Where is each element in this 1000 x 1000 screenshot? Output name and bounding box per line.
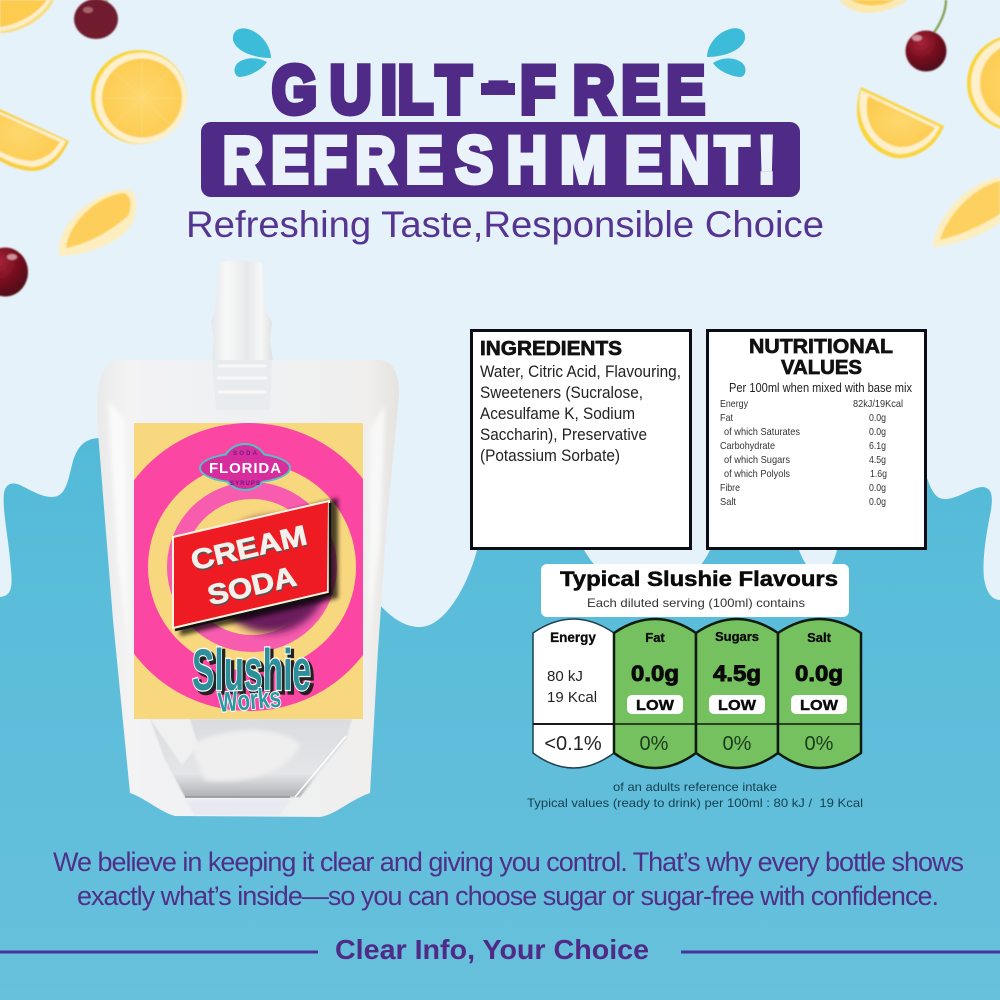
salt column xyxy=(778,619,861,768)
salt column: 0% xyxy=(805,733,834,755)
splash drops right xyxy=(707,28,746,77)
nutrition rows: Energy xyxy=(720,398,749,410)
nutritional heading: NUTRITIONAL xyxy=(749,336,893,358)
sugars column: 4.5g xyxy=(713,661,761,686)
headline: guilt-free: GUILT xyxy=(272,53,471,128)
subtitle: Refreshing Taste,Responsible Choice xyxy=(186,203,824,245)
headline: guilt-free: FREE xyxy=(520,53,705,128)
nutritional heading xyxy=(749,336,893,379)
nutrition rows: Carbohydrate xyxy=(720,440,775,452)
sugars column xyxy=(696,619,778,768)
nutrition rows: 0.0g xyxy=(869,426,886,438)
energy column: 19 Kcal xyxy=(547,689,597,706)
reference intake note: of an adults reference intake xyxy=(613,780,777,794)
nutrition rows: 4.5g xyxy=(869,454,886,466)
lemon slice top right xyxy=(839,0,908,13)
headline: guilt-free: - xyxy=(489,45,508,120)
nutrition rows: Fibre xyxy=(720,482,740,494)
pouch spout xyxy=(211,260,273,410)
title block xyxy=(186,28,824,245)
panel: typical slushie flavours heading: Each diluted serving (100ml) contains xyxy=(587,596,805,610)
product pouch xyxy=(97,260,399,817)
fat column xyxy=(614,619,696,768)
nutritional heading: VALUES xyxy=(781,357,862,379)
splash drops left xyxy=(233,28,271,77)
traffic light label xyxy=(533,619,861,768)
pouch body xyxy=(97,360,399,817)
cream soda sign: CREAM xyxy=(189,521,311,578)
footer tagline: Clear Info, Your Choice xyxy=(335,934,649,965)
energy column: 80 kJ xyxy=(547,668,583,685)
lemon slice top left xyxy=(0,0,54,33)
whole lemon left xyxy=(91,50,187,144)
nutrition rows: 0.0g xyxy=(869,412,886,424)
body statement: We believe in keeping it clear and giving you control. That’s why every bottle shows xyxy=(53,847,964,877)
nutrition rows: 1.6g xyxy=(870,468,887,480)
panel: nutritional values xyxy=(708,330,926,548)
nutrition rows: 0.0g xyxy=(869,496,886,508)
cream soda sign xyxy=(173,498,338,636)
fruit: lemon slices and cherries, right xyxy=(839,0,1000,247)
nutrition rows: 0.0g xyxy=(869,482,886,494)
lemon wedge left xyxy=(0,100,69,171)
florida badge: FLORIDA xyxy=(209,460,281,477)
ingredients list: Acesulfame K, Sodium xyxy=(480,404,635,423)
ingredients list: Saccharin), Preservative xyxy=(480,425,647,444)
clear window at bottom xyxy=(150,719,352,815)
slushie works logo: Slushie xyxy=(195,641,314,706)
sugars column: 0% xyxy=(723,733,752,755)
fat column: Fat xyxy=(645,630,665,645)
cherry top left xyxy=(74,0,118,39)
fruit: lemon slices and cherries, left xyxy=(0,0,187,296)
energy column xyxy=(533,619,614,768)
nutrition rows: Fat xyxy=(720,412,733,424)
salt column: Salt xyxy=(807,630,832,645)
whole lemon right xyxy=(967,35,1000,131)
florida badge: SYRUPS xyxy=(230,481,260,487)
energy column: Energy xyxy=(550,630,596,645)
lemon wedge right xyxy=(857,87,944,158)
fat column: 0.0g xyxy=(631,661,679,686)
reference intake note xyxy=(527,780,863,810)
fat column: 0% xyxy=(640,733,669,755)
fat column: LOW xyxy=(636,697,675,714)
nutrition rows xyxy=(720,398,903,508)
slushie works logo: Works xyxy=(217,682,282,718)
nutrition rows: of which Sugars xyxy=(724,454,790,466)
nutrition rows: 82kJ/19Kcal xyxy=(853,398,903,410)
cream soda sign: CREAM xyxy=(188,519,310,576)
sugars column: LOW xyxy=(718,697,757,714)
label concentric rings xyxy=(134,423,363,711)
nutrition rows: of which Polyols xyxy=(724,468,790,480)
cream soda sign: SODA xyxy=(205,561,299,611)
reference intake note: Typical values (ready to drink) per 100ml : 80 kJ / 19 Kcal xyxy=(527,796,863,810)
body statement xyxy=(53,847,964,911)
salt column: 0.0g xyxy=(795,661,843,686)
cream soda sign: SODA xyxy=(206,563,300,613)
lemon teardrop wedge right xyxy=(933,177,1000,247)
slushie works logo: Slushie xyxy=(192,638,311,703)
nutrition rows: 6.1g xyxy=(869,440,886,452)
ingredients list: (Potassium Sorbate) xyxy=(480,446,620,465)
sugars column: Sugars xyxy=(715,629,759,644)
ingredients heading: INGREDIENTS xyxy=(480,338,622,360)
cherry right xyxy=(906,0,946,72)
panel: typical slushie flavours heading: Typical Slushie Flavours xyxy=(560,568,838,591)
headline: refreshment: REFRESHMENT! xyxy=(223,123,776,197)
ingredients list: Water, Citric Acid, Flavouring, xyxy=(480,362,681,381)
nutrition rows: Salt xyxy=(720,496,736,508)
florida badge: SODA xyxy=(233,451,258,457)
florida badge xyxy=(199,443,291,491)
pouch highlights xyxy=(108,360,385,640)
ingredients list: Sweeteners (Sucralose, xyxy=(480,383,643,402)
banner xyxy=(201,122,800,197)
hyphen bar xyxy=(481,83,515,95)
nutrition rows: of which Saturates xyxy=(724,426,800,438)
blue milk wave background xyxy=(0,438,1000,1000)
panel: ingredients xyxy=(472,330,690,548)
lemon teardrop wedge left xyxy=(59,189,136,256)
salt column: LOW xyxy=(800,697,839,714)
cherry left xyxy=(0,248,28,296)
energy column: <0.1% xyxy=(544,733,602,755)
per 100ml note: Per 100ml when mixed with base mix xyxy=(729,381,913,395)
ingredients list xyxy=(480,362,681,465)
pouch label xyxy=(134,423,363,719)
slushie works logo xyxy=(192,638,314,718)
body statement: exactly what’s inside—so you can choose sugar or sugar-free with confidence. xyxy=(77,881,939,911)
panel: typical slushie flavours heading xyxy=(541,564,849,617)
footer tagline xyxy=(0,934,1000,965)
